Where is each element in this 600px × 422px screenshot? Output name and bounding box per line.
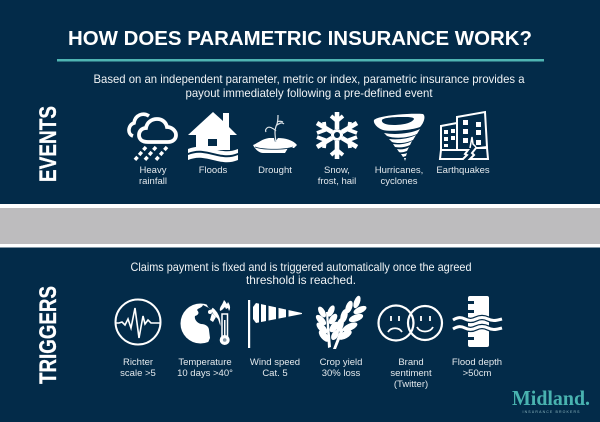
label: hurricanes, cyclones: cyclones <box>381 176 418 187</box>
label: crop yield <box>320 357 362 379</box>
label: richter scale <box>120 357 156 379</box>
label: wind speed: Cat. 5 <box>262 368 288 379</box>
label: brand sentiment: Brand <box>398 357 424 368</box>
label: flood depth: >50cm <box>463 368 491 379</box>
icon: richter scale <box>116 300 160 344</box>
icon: globe and thermometer <box>180 300 230 345</box>
label: heavy rainfall: rainfall <box>139 176 167 187</box>
logo: Midland: INSURANCE BROKERS <box>522 410 580 414</box>
label: crop yield: Crop yield <box>320 357 362 368</box>
label: drought: Drought <box>258 165 292 176</box>
label: temperature: Temperature <box>178 357 232 368</box>
icon: snowflake <box>317 112 357 159</box>
label: temperature: 10 days >40° <box>177 368 233 379</box>
icon: earthquake buildings <box>440 112 488 159</box>
label: floods: Floods <box>199 165 228 176</box>
icon: drought <box>253 115 297 153</box>
label: brand sentiment: sentiment <box>390 368 432 379</box>
icon: brand sentiment faces <box>378 306 442 340</box>
intro text: triggers: threshold is reached. <box>246 274 356 287</box>
label: heavy rainfall: Heavy <box>140 165 167 176</box>
section heading: events: EVENTS <box>35 106 62 182</box>
label: richter scale: Richter <box>123 357 153 368</box>
label: heavy rainfall <box>139 165 167 187</box>
section heading: triggers: TRIGGERS <box>35 286 62 384</box>
label: flood depth <box>452 357 502 379</box>
title: HOW DOES PARAMETRIC INSURANCE WORK? <box>68 27 532 50</box>
intro text: events: Based on an independent parameter, metric or index, parametric insurance provides a <box>94 73 525 86</box>
label: temperature <box>177 357 233 379</box>
icon: heavy rainfall <box>129 114 176 161</box>
label: wind speed <box>250 357 300 379</box>
label: crop yield: 30% loss <box>322 368 361 379</box>
intro text: events <box>94 73 525 100</box>
intro text: triggers <box>130 261 472 287</box>
intro text: triggers: Claims payment is fixed and is triggered automatically once the agreed <box>130 261 472 274</box>
intro text: events: payout immediately following a pre-defined event <box>186 87 433 100</box>
icon: floods <box>188 112 238 162</box>
icon: crop yield wheat <box>314 295 368 349</box>
label: flood depth: Flood depth <box>452 357 502 368</box>
label: wind speed: Wind speed <box>250 357 300 368</box>
icon: tornado <box>374 114 424 161</box>
label: richter scale: scale >5 <box>120 368 156 379</box>
label: hurricanes, cyclones <box>375 165 423 187</box>
icon: wind sock <box>248 300 302 348</box>
label: snow, frost, hail: Snow, <box>324 165 350 176</box>
label: brand sentiment <box>390 357 432 390</box>
label: earthquakes: Earthquakes <box>436 165 490 176</box>
logo: Midland: Midland. <box>512 386 590 410</box>
label: hurricanes, cyclones: Hurricanes, <box>375 165 423 176</box>
icon: flood depth gauge <box>453 296 502 347</box>
label: snow, frost, hail <box>318 165 356 187</box>
label: brand sentiment: (Twitter) <box>394 379 428 390</box>
label: snow, frost, hail: frost, hail <box>318 176 356 187</box>
